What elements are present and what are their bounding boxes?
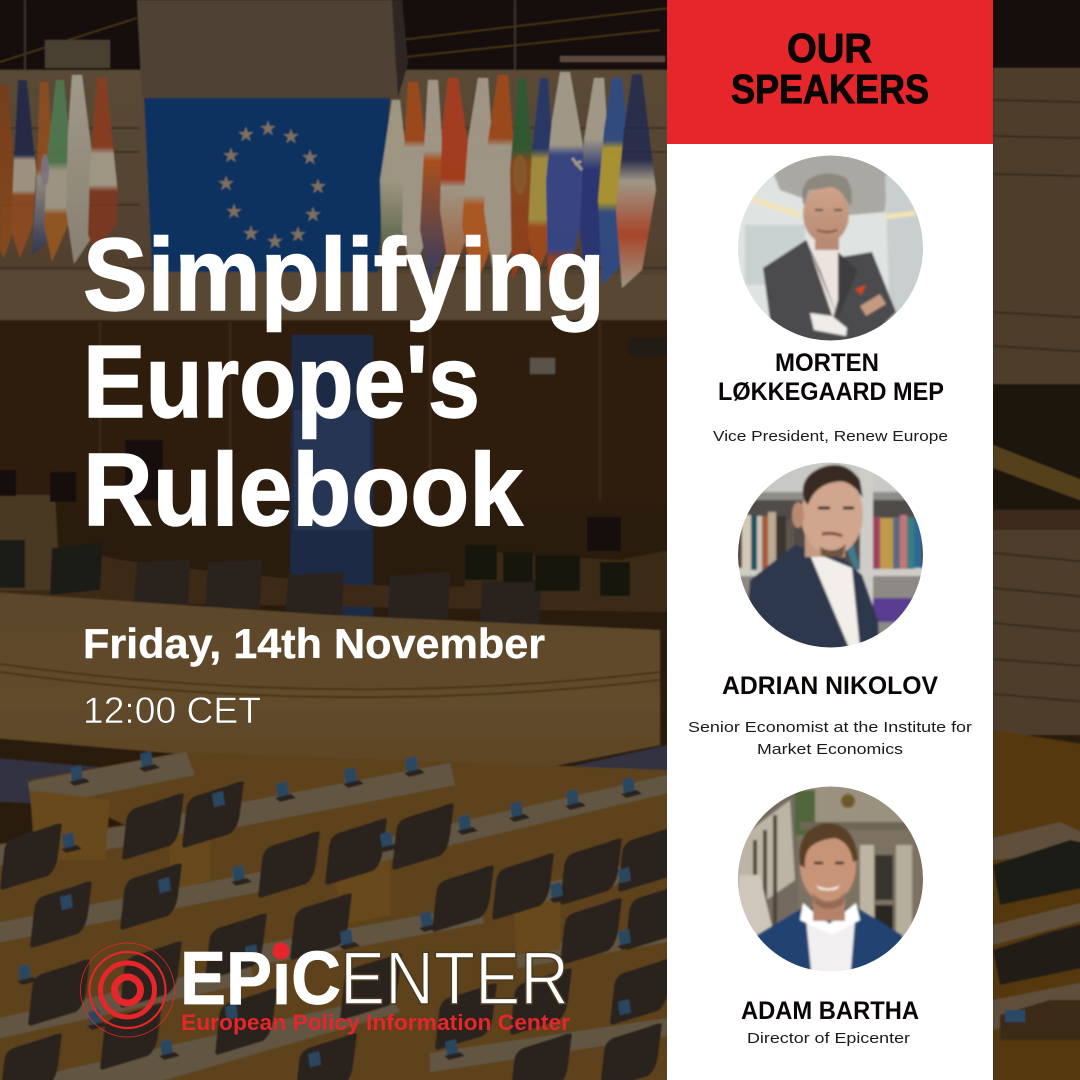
desk monitors [17,751,642,1072]
speaker role: Senior Economist [688,719,972,758]
EU flag panel: ★ [242,223,260,245]
title [83,217,605,547]
EU flag panel: ★ [237,124,255,146]
event time: 12:00 CET [83,690,261,731]
heading: our speakers: SPEAKERS [731,66,929,112]
title: Simplifying [83,217,605,332]
EU flag panel: ★ [217,173,235,195]
logo tagline: European Policy Information Center [181,1010,570,1035]
EU flag panel: ★ [259,118,277,140]
speaker role: Senior Economist: Senior Economist at the Institute for [688,719,972,736]
right strip background [993,0,1080,1080]
heading: our speakers [731,25,929,112]
curved wood front band [0,590,660,775]
blue carpet [0,745,668,815]
wooden wall behind flags [0,70,670,320]
icon: concentric rings [80,943,174,1037]
speaker role: Senior Economist: Market Economics [757,741,903,758]
EU flag panel: ★ [304,204,322,226]
EU flag panel: ★ [301,147,319,169]
EU flag panel: ★ [282,126,300,148]
logo red dot [272,942,290,960]
speaker name: Morten Løkkegaard MEP [718,349,944,406]
EU flag panel: ★ [225,201,243,223]
upper gallery: dark glass band [0,0,1080,72]
logo: epicenter [80,936,570,1037]
portrait: Morten Løkkegaard [738,156,923,340]
seating rows [0,752,668,1080]
lower wood paneling band at flag foot [0,270,670,322]
title: Europe's [83,324,480,439]
speaker name: Adam Bartha: ADAM BARTHA [741,997,919,1025]
title: Rulebook [83,432,524,547]
chairs [0,781,687,1080]
event date: Friday, 14th November [83,620,545,667]
EU flag panel: ★ [289,224,307,246]
logo wordmark: EPiC [180,936,341,1020]
heading: our speakers: OUR [787,25,872,71]
EU flag panel: ★ [222,145,240,167]
flags left [0,75,118,264]
panel: red speakers header [667,0,993,144]
speaker name: Morten Løkkegaard MEP: LØKKEGAARD MEP [718,378,944,406]
EU flag panel [144,98,390,272]
screen above EU flag [137,0,398,98]
EU flag panel: ★ [266,231,284,253]
speaker name: Adrian Nikolov: ADRIAN NIKOLOV [722,672,938,700]
logo wordmark: ENTER [340,936,569,1020]
logo wordmark [180,936,569,1020]
middle desks row [0,440,670,630]
speaker role: Vice President: Vice President, Renew Europe [713,428,948,445]
speaker role: Director of Epicenter: Director of Epicenter [747,1030,910,1047]
EU flag panel: ★ [309,176,327,198]
portrait: Adam Bartha [738,786,923,972]
portrait: Adrian Nikolov [738,462,923,648]
panel: white speakers column [667,0,993,1080]
flags right [41,72,656,290]
speaker name: Morten Løkkegaard MEP: MORTEN [775,349,879,377]
blue vertical banner [290,335,373,618]
dark wood back wall [0,320,670,505]
